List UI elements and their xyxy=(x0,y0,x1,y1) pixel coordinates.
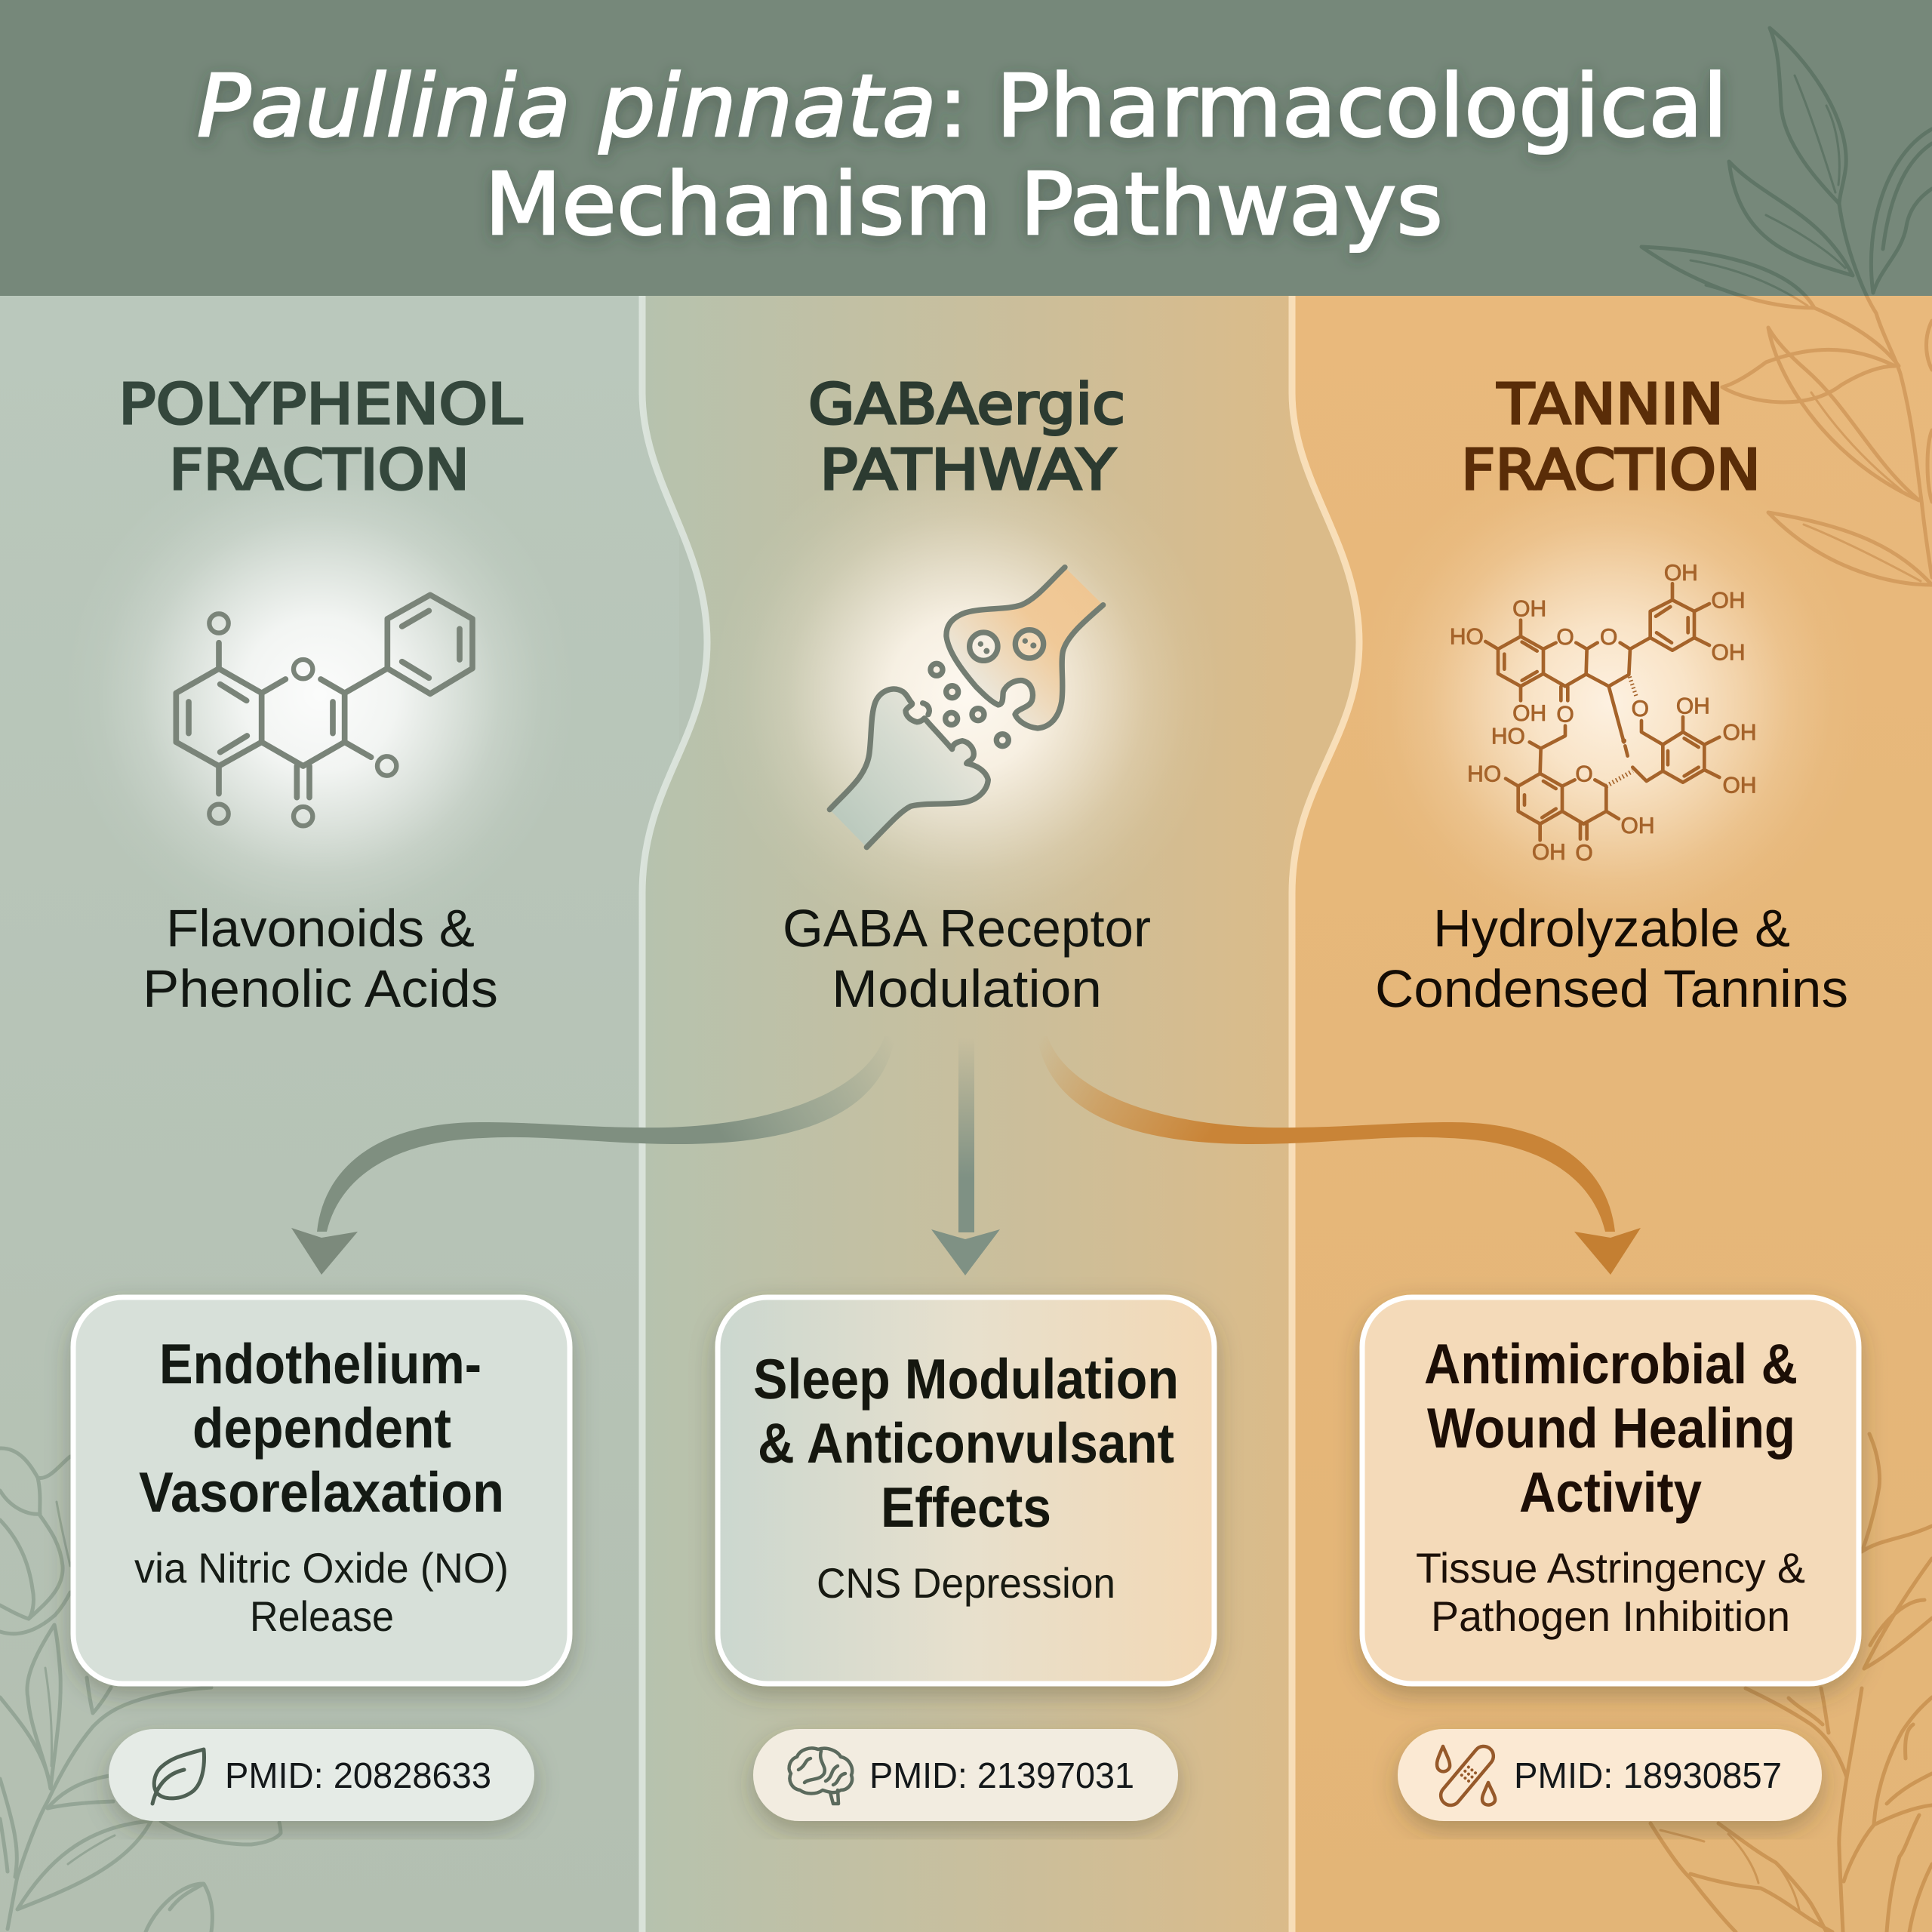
heading: polyphenol fraction: FRACTION xyxy=(169,438,469,503)
card: antimicrobial and wound healing: Pathogen Inhibition xyxy=(1431,1592,1790,1640)
icon: tannin molecule: OH xyxy=(1711,640,1745,665)
icon: bandage and drops xyxy=(1437,1743,1497,1809)
icon: tannin molecule: OH xyxy=(1664,560,1698,586)
card: sleep modulation: Effects xyxy=(881,1475,1051,1539)
subtitle: flavonoids and phenolic acids: Phenolic Acids xyxy=(143,959,498,1018)
heading: GABAergic pathway xyxy=(808,372,1125,503)
card: vasorelaxation: via Nitric Oxide (NO) xyxy=(134,1544,509,1592)
icon: tannin molecule: O xyxy=(1575,761,1593,786)
subtitle: flavonoids and phenolic acids: Flavonoids & xyxy=(166,899,475,958)
card: sleep modulation xyxy=(718,1297,1214,1684)
card: vasorelaxation: Vasorelaxation xyxy=(139,1460,504,1524)
card: vasorelaxation xyxy=(73,1297,570,1684)
panel: tannin column background xyxy=(1245,296,1932,1932)
icon: tannin molecule: O xyxy=(1600,624,1617,650)
icon: tannin molecule: OH xyxy=(1512,596,1546,621)
column 2 glow xyxy=(709,438,1223,951)
subtitle: hydrolyzable and condensed tannins xyxy=(1375,899,1848,1018)
icon: flavonoid molecule xyxy=(176,595,472,826)
card: antimicrobial and wound healing: Antimicrobial & xyxy=(1424,1332,1798,1395)
icon: tannin molecule: O xyxy=(1575,840,1593,866)
icon: tannin molecule: OH xyxy=(1722,773,1756,798)
icon: tannin molecule xyxy=(1450,560,1756,866)
icon: tannin molecule: HO xyxy=(1450,624,1484,649)
card: vasorelaxation: Endothelium- xyxy=(159,1332,481,1395)
card: vasorelaxation: dependent xyxy=(192,1396,451,1460)
decorative leaves: top right on tannin column xyxy=(1721,296,1932,587)
divider: wavy line two xyxy=(1292,296,1359,1932)
pill: PMID 21397031 xyxy=(753,1729,1178,1821)
icon: tannin molecule: OH xyxy=(1711,588,1745,613)
card: antimicrobial and wound healing: Activity xyxy=(1519,1460,1702,1524)
icon: tannin molecule: OH xyxy=(1620,813,1654,838)
arrow: to vasorelaxation card xyxy=(291,1036,895,1275)
card: antimicrobial and wound healing: Tissue Astringency & xyxy=(1416,1544,1805,1592)
heading: GABAergic pathway: GABAergic xyxy=(808,372,1125,437)
icon: leaf xyxy=(152,1749,204,1804)
icon: tannin molecule: OH xyxy=(1722,720,1756,745)
decorative leaves: top right on header xyxy=(1639,26,1932,296)
icon: tannin molecule: HO xyxy=(1491,724,1525,749)
icon: tannin molecule: HO xyxy=(1467,761,1501,786)
header band xyxy=(0,0,1932,296)
pill: PMID 20828633: PMID: 20828633 xyxy=(225,1756,491,1796)
decorative leaves: lower left xyxy=(0,1448,281,1932)
heading: GABAergic pathway: PATHWAY xyxy=(820,438,1116,503)
arrow: to antimicrobial card xyxy=(1037,1036,1641,1275)
pill: PMID 20828633 xyxy=(109,1729,534,1821)
heading: polyphenol fraction: POLYPHENOL xyxy=(118,372,522,437)
subtitle: GABA receptor modulation xyxy=(783,899,1151,1018)
icon: tannin molecule: O xyxy=(1632,696,1649,721)
heading: tannin fraction: FRACTION xyxy=(1461,438,1761,503)
title: Mechanism Pathways xyxy=(485,154,1443,254)
icon: tannin molecule: OH xyxy=(1512,700,1546,726)
pill: PMID 21397031: PMID: 21397031 xyxy=(869,1756,1134,1796)
subtitle: GABA receptor modulation: GABA Receptor xyxy=(783,899,1151,958)
panel: polyphenol column background xyxy=(0,296,679,1932)
card: sleep modulation: Sleep Modulation xyxy=(753,1347,1179,1411)
icon: tannin molecule: OH xyxy=(1676,694,1710,718)
divider: wavy line one xyxy=(642,296,707,1932)
heading: polyphenol fraction xyxy=(118,372,522,503)
subtitle: flavonoids and phenolic acids xyxy=(143,899,498,1018)
icon: synapse with GABA vesicles xyxy=(829,568,1103,848)
decorative leaves: lower right xyxy=(1651,1434,1932,1932)
subtitle: GABA receptor modulation: Modulation xyxy=(832,959,1102,1018)
pill: PMID 18930857: PMID: 18930857 xyxy=(1514,1756,1782,1796)
icon: tannin molecule: OH xyxy=(1532,839,1566,865)
card: antimicrobial and wound healing: Wound Healing xyxy=(1427,1396,1795,1460)
card: vasorelaxation: Release xyxy=(250,1592,394,1640)
panel: GABAergic column background xyxy=(642,296,1359,1932)
card: sleep modulation: CNS Depression xyxy=(817,1559,1115,1607)
column 3 glow xyxy=(1354,445,1867,958)
icon: tannin molecule: O xyxy=(1556,624,1574,650)
subtitle: hydrolyzable and condensed tannins: Condensed Tannins xyxy=(1375,959,1848,1018)
arrow: to sleep modulation card xyxy=(931,1038,1000,1275)
heading: tannin fraction xyxy=(1461,372,1761,503)
column 1 glow xyxy=(63,438,577,951)
subtitle: hydrolyzable and condensed tannins: Hydrolyzable & xyxy=(1433,899,1790,958)
heading: tannin fraction: TANNIN xyxy=(1497,372,1724,437)
title: : Pharmacological xyxy=(938,56,1727,156)
icon: brain xyxy=(789,1748,852,1804)
icon: tannin molecule: O xyxy=(1556,702,1574,727)
title: Paullinia pinnata xyxy=(197,56,937,156)
title xyxy=(197,56,1727,254)
card: sleep modulation: & Anticonvulsant xyxy=(758,1411,1174,1475)
card: antimicrobial and wound healing xyxy=(1362,1297,1859,1684)
pill: PMID 18930857 xyxy=(1398,1729,1822,1821)
